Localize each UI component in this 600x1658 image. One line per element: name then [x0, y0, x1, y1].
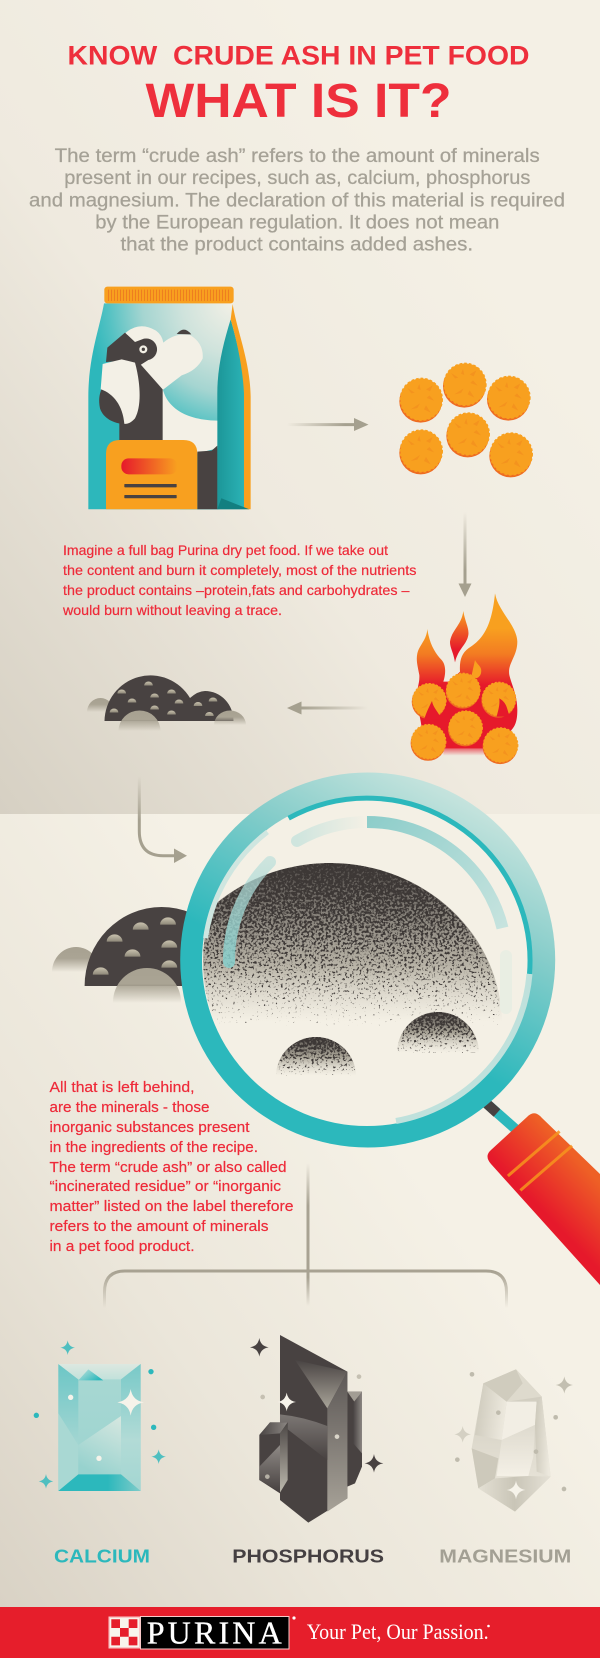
title — [68, 41, 530, 128]
text: minerals explanation: All that is left behind, — [50, 1080, 194, 1096]
text: minerals explanation: in the ingredients of the recipe. — [50, 1140, 258, 1156]
icon: burning kibble — [411, 593, 518, 764]
label: calcium: CALCIUM — [54, 1547, 150, 1567]
flames — [416, 593, 517, 748]
icon: phosphorus crystal — [250, 1335, 383, 1523]
kibbles in fire — [446, 673, 480, 709]
magnifier glass — [202, 796, 532, 1126]
lens inner rim — [206, 798, 530, 1121]
dog illustration — [99, 326, 217, 509]
magnifier handle stem — [486, 1103, 520, 1133]
arrow: flames to ash — [287, 702, 368, 714]
tagline: Your Pet, Our Passion. — [307, 1619, 489, 1644]
footer bar — [0, 1607, 600, 1658]
logo checkerboard — [108, 1616, 140, 1648]
intro paragraph: present in our recipes, such as, calcium, phosphorus — [64, 168, 530, 189]
intro paragraph: that the product contains added ashes. — [120, 234, 473, 256]
bag side gusset — [217, 319, 245, 509]
bracket to three minerals — [104, 1163, 506, 1310]
magnified ash — [203, 863, 500, 1076]
text: minerals explanation — [50, 1080, 294, 1255]
icon: magnifying glass — [158, 772, 600, 1285]
bag label — [106, 440, 197, 509]
text: minerals explanation: are the minerals - those — [50, 1100, 210, 1116]
text: imagine a full bag: the product contains –protein,fats and carbohydrates – — [63, 582, 410, 598]
title: KNOW CRUDE ASH IN PET FOOD — [68, 41, 530, 71]
magnifier ring — [180, 772, 555, 1148]
intro paragraph: The term “crude ash” refers to the amount of minerals — [55, 146, 540, 167]
icon: magnesium crystal — [454, 1369, 573, 1512]
text: imagine a full bag: would burn without leaving a trace. — [62, 602, 282, 618]
text: imagine a full bag: the content and burn it completely, most of the nutrients — [63, 562, 416, 578]
title: WHAT IS IT? — [146, 75, 452, 128]
background: lower section — [0, 814, 600, 1607]
text: minerals explanation: matter” listed on the label therefore — [50, 1199, 294, 1215]
text: minerals explanation: in a pet food product. — [50, 1239, 194, 1255]
arrow: kibble to flames — [458, 512, 472, 597]
arrow: bent ash to magnifier — [139, 776, 187, 863]
intro paragraph: by the European regulation. It does not mean — [95, 212, 499, 233]
arrow: bag to kibble — [287, 418, 368, 431]
icon: small ash pile — [87, 675, 246, 731]
text: imagine a full bag: Imagine a full bag Purina dry pet food. If we take out — [63, 542, 388, 558]
label: magnesium: MAGNESIUM — [439, 1547, 571, 1567]
text: imagine a full bag — [62, 542, 416, 618]
intro paragraph — [29, 146, 565, 256]
text: minerals explanation: inorganic substances present — [50, 1120, 250, 1136]
icon: pet food bag — [88, 287, 251, 509]
magnifier handle — [488, 1113, 600, 1285]
icon: kibble group — [399, 363, 532, 477]
lens highlights — [229, 822, 506, 1008]
background: upper section — [0, 0, 600, 814]
intro paragraph: and magnesium. The declaration of this material is required — [29, 190, 565, 211]
text: minerals explanation: “incinerated residue” or “inorganic — [50, 1179, 281, 1195]
icon: large ash pile behind magnifier — [52, 907, 239, 1003]
logo: Purina — [108, 1614, 296, 1650]
text: minerals explanation: The term “crude ash” or also called — [50, 1160, 286, 1176]
icon: calcium crystal — [34, 1340, 166, 1491]
text: minerals explanation: refers to the amount of minerals — [50, 1219, 268, 1235]
bag top band — [104, 287, 234, 303]
bag orange edge — [231, 304, 251, 509]
label: phosphorus: PHOSPHORUS — [232, 1547, 384, 1567]
logo wordmark: PURINA — [147, 1614, 282, 1650]
